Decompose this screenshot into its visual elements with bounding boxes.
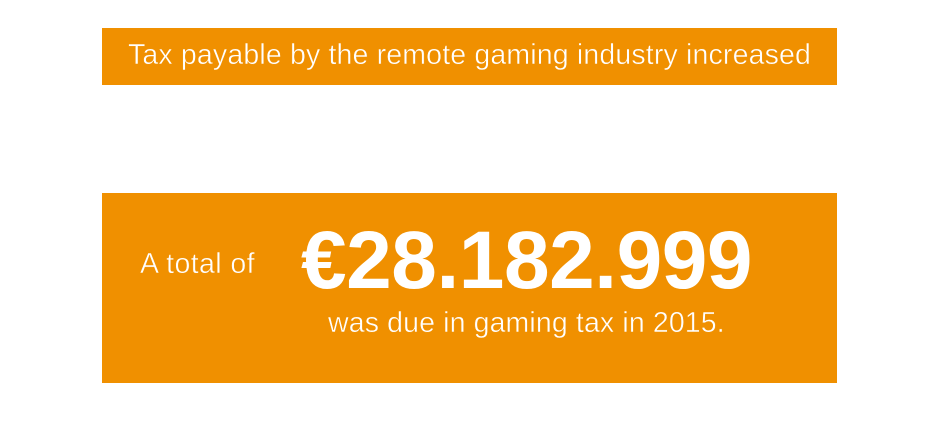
caption: was due in gaming tax in 2015. xyxy=(328,307,725,339)
banner heading: Tax payable by the remote gaming industry increased xyxy=(128,39,811,71)
top banner xyxy=(102,28,837,85)
big amount: €28.182.999 xyxy=(301,215,752,306)
panel: gaming tax total xyxy=(102,193,837,383)
lead-in text: A total of xyxy=(140,248,255,280)
